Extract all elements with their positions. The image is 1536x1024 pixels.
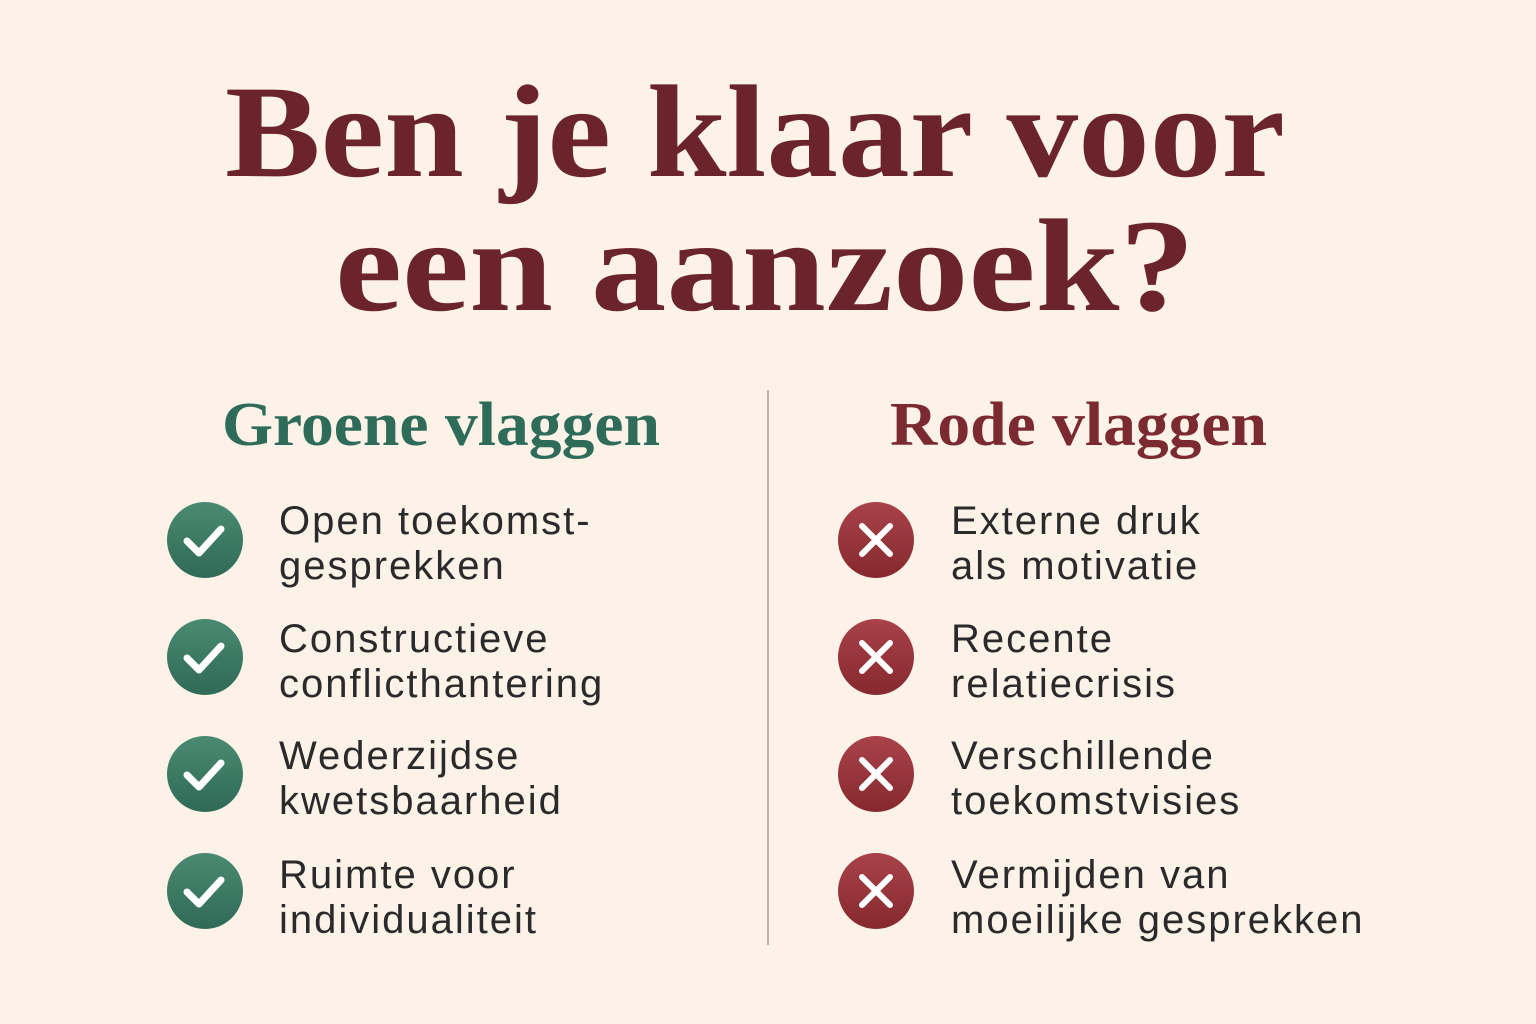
item: green 3 [167, 734, 563, 823]
item: green 2 [167, 617, 604, 706]
item: red 1 [838, 499, 1202, 588]
item: red 1: Externe druk [951, 499, 1202, 543]
item: green 1: gesprekken [279, 544, 506, 588]
item: red 3 [838, 734, 1241, 823]
panel: red flags [838, 499, 1365, 942]
item: green 3: kwetsbaarheid [279, 779, 563, 823]
divider [767, 390, 769, 945]
item: red 4: moeilijke gesprekken [951, 898, 1365, 942]
panel: green flags [167, 499, 604, 942]
item: green 2: conflicthantering [279, 662, 604, 706]
title: een aanzoek? [335, 192, 1195, 339]
item: green 1: Open toekomst- [279, 499, 592, 543]
title [225, 58, 1285, 339]
item: red 1: als motivatie [951, 544, 1199, 588]
item: green 3: Wederzijdse [279, 734, 520, 778]
title: Ben je klaar voor [225, 58, 1285, 205]
item: red 4: Vermijden van [951, 853, 1230, 897]
item: red 4 [838, 853, 1365, 942]
heading: rode vlaggen: Rode vlaggen [890, 391, 1267, 459]
item: red 2: relatiecrisis [951, 662, 1177, 706]
item: green 4: individualiteit [279, 898, 538, 942]
item: green 4 [167, 853, 538, 942]
item: green 4: Ruimte voor [279, 853, 517, 897]
item: red 3: Verschillende [951, 734, 1215, 778]
item: green 1 [167, 499, 592, 588]
item: red 3: toekomstvisies [951, 779, 1241, 823]
item: red 2 [838, 617, 1177, 706]
item: red 2: Recente [951, 617, 1114, 661]
item: green 2: Constructieve [279, 617, 550, 661]
heading: groene vlaggen: Groene vlaggen [222, 391, 660, 459]
